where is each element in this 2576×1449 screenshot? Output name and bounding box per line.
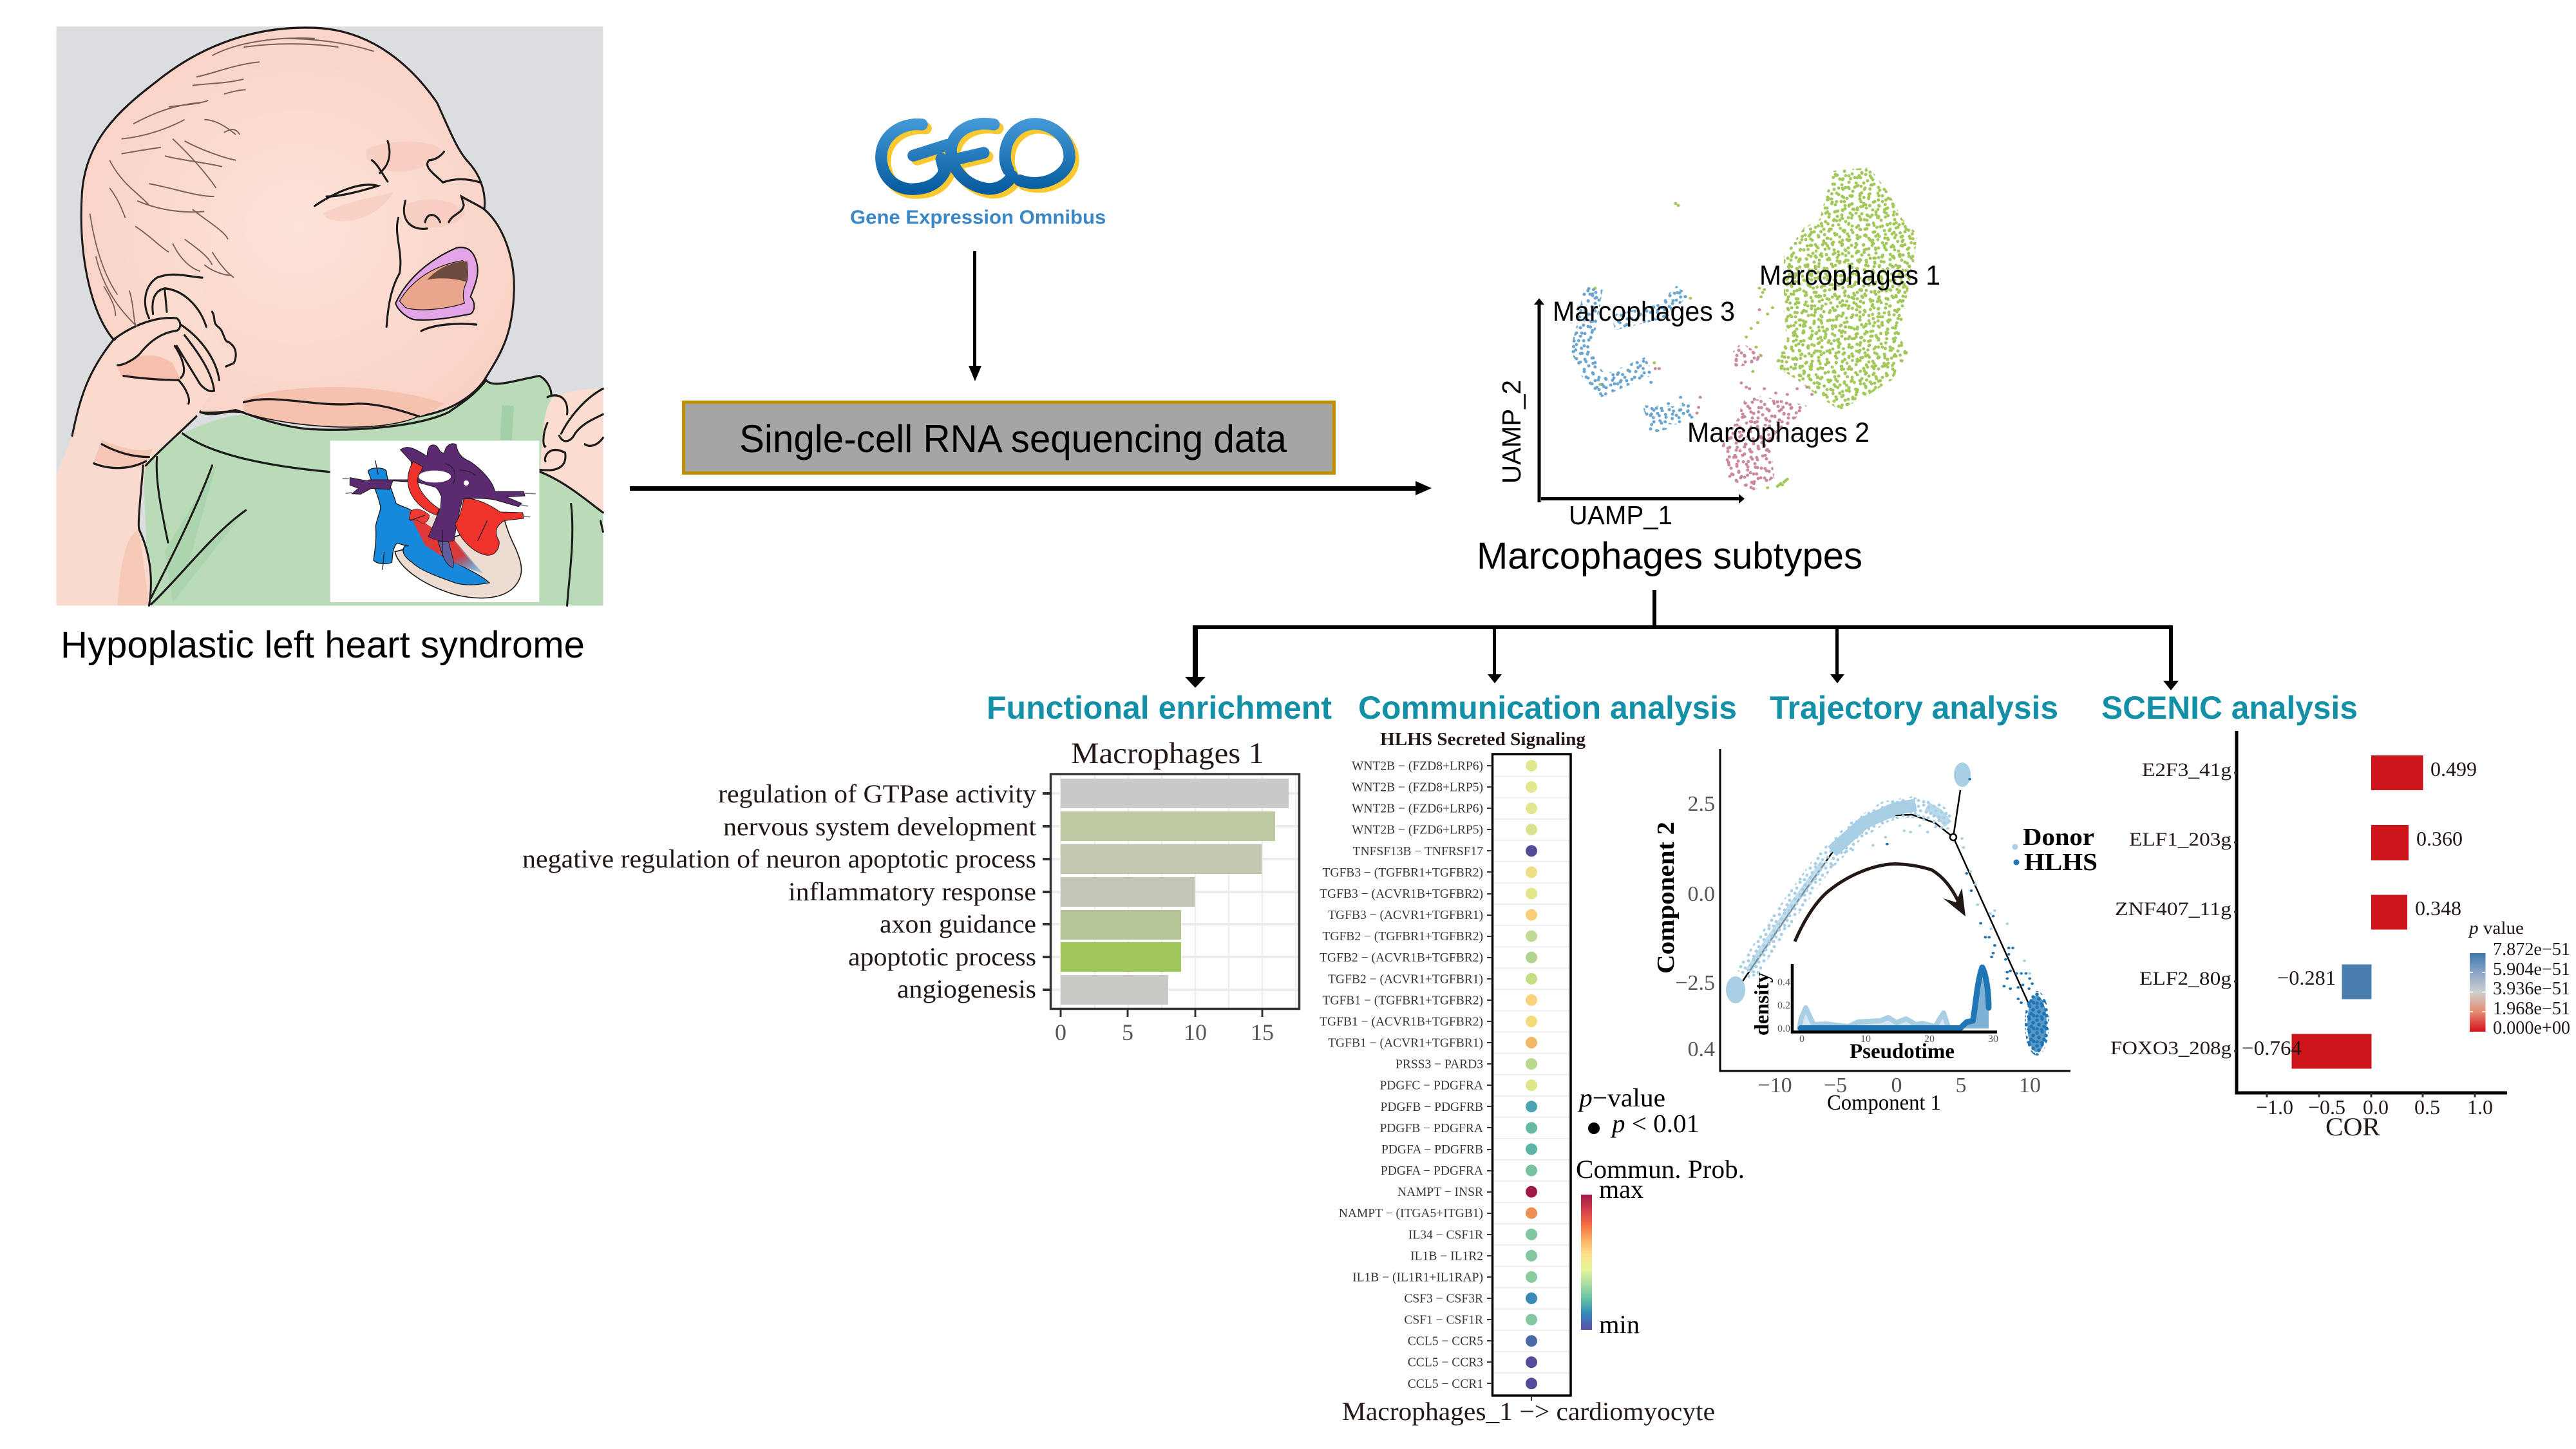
y axis label: Component 2: Component 2 xyxy=(1653,822,1680,974)
ligand-receptor labels: PRSS3 − PARD3 xyxy=(1396,1058,1483,1072)
x tick labels: 15 xyxy=(1251,1019,1274,1045)
ligand-receptor labels: TGFB1 − (TGFBR1+TGFBR2) xyxy=(1322,994,1483,1007)
legend: p value xyxy=(2468,918,2570,1038)
arrow: GEO to data box xyxy=(969,251,981,381)
inset density plot: Pseudotime xyxy=(1850,1040,1955,1063)
y tick labels: 2.5 xyxy=(1687,792,1715,816)
inset density plot: 0.0 xyxy=(1777,1023,1790,1034)
panel: enrichment bar chart xyxy=(522,737,1300,1045)
inset density plot: 20 xyxy=(1924,1034,1935,1045)
ligand-receptor labels: NAMPT − (ITGA5+ITGB1) xyxy=(1339,1207,1483,1220)
ligand-receptor labels: CCL5 − CCR5 xyxy=(1408,1335,1483,1349)
heading: Marcophages subtypes: Marcophages subtypes xyxy=(1477,535,1862,577)
x axis label: COR: COR xyxy=(2325,1112,2380,1141)
legend: communication probability: min xyxy=(1599,1310,1640,1339)
legend: Donor and HLHS: HLHS xyxy=(2024,849,2098,876)
value labels: −0.281 xyxy=(2277,966,2336,989)
heading: Trajectory analysis: Trajectory analysis xyxy=(1770,690,2058,726)
inset density plot: 0 xyxy=(1799,1034,1804,1045)
regulon labels xyxy=(2110,759,2231,1059)
x tick labels: 0.0 xyxy=(2363,1095,2389,1119)
ligand-receptor labels: TGFB1 − (ACVR1+TGFBR1) xyxy=(1328,1037,1483,1050)
regulon labels: ZNF407_11g xyxy=(2115,898,2231,920)
x tick labels: −10 xyxy=(1757,1074,1792,1097)
ligand-receptor labels: CSF3 − CSF3R xyxy=(1404,1292,1483,1306)
panel: SCENIC correlation bars xyxy=(2110,731,2570,1141)
x tick labels: 0.5 xyxy=(2414,1095,2440,1119)
donor cells xyxy=(1726,762,2030,1003)
x tick labels: 10 xyxy=(1184,1019,1207,1045)
x tick labels: 5 xyxy=(1955,1074,1967,1097)
axes xyxy=(2237,731,2507,1093)
icon: GEO logo: Gene Expression Omnibus xyxy=(850,206,1106,228)
row separators xyxy=(1493,777,1569,1373)
regulon labels: ELF1_203g xyxy=(2129,829,2231,850)
inset density plot: 0.2 xyxy=(1777,1000,1790,1011)
x ticks xyxy=(1061,1009,1262,1017)
term labels xyxy=(522,779,1036,1003)
regulon labels: E2F3_41g xyxy=(2142,759,2231,781)
ligand-receptor labels: CSF1 − CSF1R xyxy=(1404,1314,1483,1327)
x tick labels: 0 xyxy=(1891,1074,1902,1097)
ligand-receptor labels: PDGFC − PDGFRA xyxy=(1379,1079,1483,1093)
bars xyxy=(2291,755,2423,1069)
box: single-cell RNA sequencing data: Single-cell RNA sequencing data xyxy=(739,417,1287,460)
hair strokes xyxy=(90,38,374,327)
panel: baby illustration xyxy=(57,26,603,605)
ligand-receptor labels: PDGFB − PDGFRA xyxy=(1379,1122,1483,1135)
ligand-receptor labels: PDGFB − PDGFRB xyxy=(1381,1101,1483,1114)
trajectory branch node xyxy=(1950,834,1956,840)
panel: UMAP macrophage subtypes xyxy=(1477,167,1940,577)
ligand-receptor labels: TGFB1 − (ACVR1B+TGFBR2) xyxy=(1320,1015,1483,1029)
panel: communication dot plot xyxy=(1320,729,1745,1426)
chart grid xyxy=(1061,775,1296,1009)
box: single-cell RNA sequencing data xyxy=(684,402,1334,473)
term labels: angiogenesis xyxy=(897,974,1036,1003)
inset density plot: 30 xyxy=(1988,1034,1998,1045)
x tick labels: −1.0 xyxy=(2256,1095,2293,1119)
ligand-receptor labels: IL1B − (IL1R1+IL1RAP) xyxy=(1352,1271,1483,1284)
ligand-receptor labels: WNT2B − (FZD6+LRP5) xyxy=(1352,824,1483,837)
x tick labels xyxy=(1757,1074,2041,1097)
legend: p-value xyxy=(1577,1083,1700,1138)
axis label: UAMP_2: UAMP_2 xyxy=(1497,380,1526,484)
chart title: HLHS Secreted Signaling: HLHS Secreted Signaling xyxy=(1380,729,1586,750)
y tick labels: −2.5 xyxy=(1675,971,1715,995)
arrow: main flow to UMAP xyxy=(630,481,1432,495)
heading: Functional enrichment: Functional enrichment xyxy=(987,690,1332,726)
dots xyxy=(1526,760,1537,1389)
ligand-receptor labels xyxy=(1320,760,1483,1391)
inset density plot xyxy=(1750,964,1998,1063)
ligand-receptor labels: TNFSF13B − TNFRSF17 xyxy=(1353,845,1483,858)
axes xyxy=(1720,749,2070,1071)
axis label: UAMP_1: UAMP_1 xyxy=(1569,500,1672,530)
frame xyxy=(1051,774,1300,1009)
value labels: 0.348 xyxy=(2415,896,2461,920)
legend: p value: p value xyxy=(2468,918,2524,938)
UMAP cluster: Marcophages 2 cells xyxy=(1655,310,1812,491)
ligand-receptor labels: WNT2B − (FZD6+LRP6) xyxy=(1352,802,1483,816)
term labels: nervous system development xyxy=(723,812,1036,841)
x tick labels xyxy=(2256,1095,2493,1119)
regulon labels: ELF2_80g xyxy=(2139,968,2231,989)
x tick labels: 10 xyxy=(2019,1074,2041,1097)
inset density plot: 0.4 xyxy=(1777,977,1790,988)
heading: Communication analysis: Communication analysis xyxy=(1358,690,1737,726)
icon: heart diagram inset xyxy=(330,440,539,602)
tree connector to four analyses xyxy=(1185,590,2179,690)
term labels: inflammatory response xyxy=(788,877,1036,906)
inset density plot: 10 xyxy=(1861,1034,1871,1045)
ligand-receptor labels: TGFB3 − (TGFBR1+TGFBR2) xyxy=(1322,866,1483,880)
UMAP cluster: Marcophages 1 cells xyxy=(1595,167,1917,488)
ticks xyxy=(1487,766,1531,1401)
x tick labels: 1.0 xyxy=(2467,1095,2493,1119)
heading: SCENIC analysis: SCENIC analysis xyxy=(2101,690,2358,726)
UMAP cluster: Marcophages 3 cells xyxy=(1580,288,1692,431)
x tick labels: −0.5 xyxy=(2308,1095,2345,1119)
legend: p value: 5.904e−51 xyxy=(2493,960,2570,980)
ticks xyxy=(2234,773,2475,1097)
regulon labels: FOXO3_208g xyxy=(2110,1037,2231,1059)
ligand-receptor labels: TGFB2 − (ACVR1B+TGFBR2) xyxy=(1320,951,1483,965)
x tick labels xyxy=(1055,1019,1274,1045)
UMAP axes xyxy=(1534,298,1745,504)
y tick labels xyxy=(1675,792,1715,1061)
row grid lines xyxy=(1051,793,1300,990)
panel: trajectory plot xyxy=(1653,749,2098,1115)
legend: p-value: p−value xyxy=(1577,1083,1665,1112)
icon: GEO logo xyxy=(850,124,1106,228)
value labels: −0.764 xyxy=(2242,1036,2302,1059)
y tick labels: 0.4 xyxy=(1687,1037,1715,1061)
x tick labels: 0 xyxy=(1055,1019,1066,1045)
ligand-receptor labels: PDGFA − PDGFRB xyxy=(1381,1143,1483,1157)
value labels: 0.499 xyxy=(2430,757,2477,781)
HLHS cells xyxy=(1887,779,2049,1056)
frame xyxy=(1493,754,1571,1396)
legend: communication probability: Commun. Prob. xyxy=(1576,1155,1745,1184)
ligand-receptor labels: IL1B − IL1R2 xyxy=(1410,1249,1483,1263)
ligand-receptor labels: CCL5 − CCR3 xyxy=(1408,1356,1483,1370)
value labels: 0.360 xyxy=(2416,827,2463,850)
ligand-receptor labels: TGFB3 − (ACVR1+TGFBR1) xyxy=(1328,909,1483,922)
bars xyxy=(1061,779,1289,1005)
ligand-receptor labels: NAMPT − INSR xyxy=(1397,1186,1483,1199)
legend: p-value: p < 0.01 xyxy=(1610,1109,1700,1138)
baby drawing xyxy=(57,26,603,605)
term labels: negative regulation of neuron apoptotic process xyxy=(522,844,1036,873)
ligand-receptor labels: WNT2B − (FZD8+LRP6) xyxy=(1352,760,1483,773)
x tick labels: −5 xyxy=(1824,1074,1847,1097)
label: Marcophages 1: Marcophages 1 xyxy=(1759,260,1940,291)
label: Marcophages 2: Marcophages 2 xyxy=(1687,417,1870,448)
legend: p value: 3.936e−51 xyxy=(2493,979,2570,999)
term labels: apoptotic process xyxy=(848,942,1036,971)
legend: p value: 7.872e−51 xyxy=(2493,940,2570,960)
heading: Hypoplastic left heart syndrome: Hypoplastic left heart syndrome xyxy=(61,624,585,666)
x tick labels: 5 xyxy=(1122,1019,1133,1045)
legend: communication probability xyxy=(1576,1155,1745,1339)
ligand-receptor labels: TGFB2 − (ACVR1+TGFBR1) xyxy=(1328,972,1483,986)
ligand-receptor labels: TGFB2 − (TGFBR1+TGFBR2) xyxy=(1322,930,1483,943)
y tick labels: 0.0 xyxy=(1687,882,1715,906)
x axis label: Component 1: Component 1 xyxy=(1827,1091,1941,1115)
ligand-receptor labels: WNT2B − (FZD8+LRP5) xyxy=(1352,781,1483,795)
arrow: pseudotime direction xyxy=(1795,864,1965,942)
ligand-receptor labels: TGFB3 − (ACVR1B+TGFBR2) xyxy=(1320,887,1483,901)
legend: Donor and HLHS: Donor xyxy=(2023,824,2094,851)
legend: p value: 1.968e−51 xyxy=(2493,999,2570,1019)
y ticks xyxy=(1043,793,1050,990)
term labels: axon guidance xyxy=(880,909,1036,938)
term labels: regulation of GTPase activity xyxy=(718,779,1036,808)
chart title: Macrophages 1: Macrophages 1 xyxy=(1071,737,1264,770)
inset density plot: density xyxy=(1750,972,1773,1036)
trajectory line xyxy=(1742,790,2031,1008)
ligand-receptor labels: PDGFA − PDGFRA xyxy=(1381,1164,1483,1178)
legend: communication probability: max xyxy=(1599,1175,1643,1204)
label: Marcophages 3: Marcophages 3 xyxy=(1553,296,1735,327)
legend: p value: 0.000e+00 xyxy=(2493,1018,2570,1038)
ligand-receptor labels: CCL5 − CCR1 xyxy=(1408,1378,1483,1391)
x axis label: Macrophages_1 −> cardiomyocyte xyxy=(1342,1397,1715,1426)
value labels xyxy=(2242,757,2477,1059)
ligand-receptor labels: IL34 − CSF1R xyxy=(1408,1228,1483,1242)
legend: Donor and HLHS xyxy=(2012,824,2098,876)
